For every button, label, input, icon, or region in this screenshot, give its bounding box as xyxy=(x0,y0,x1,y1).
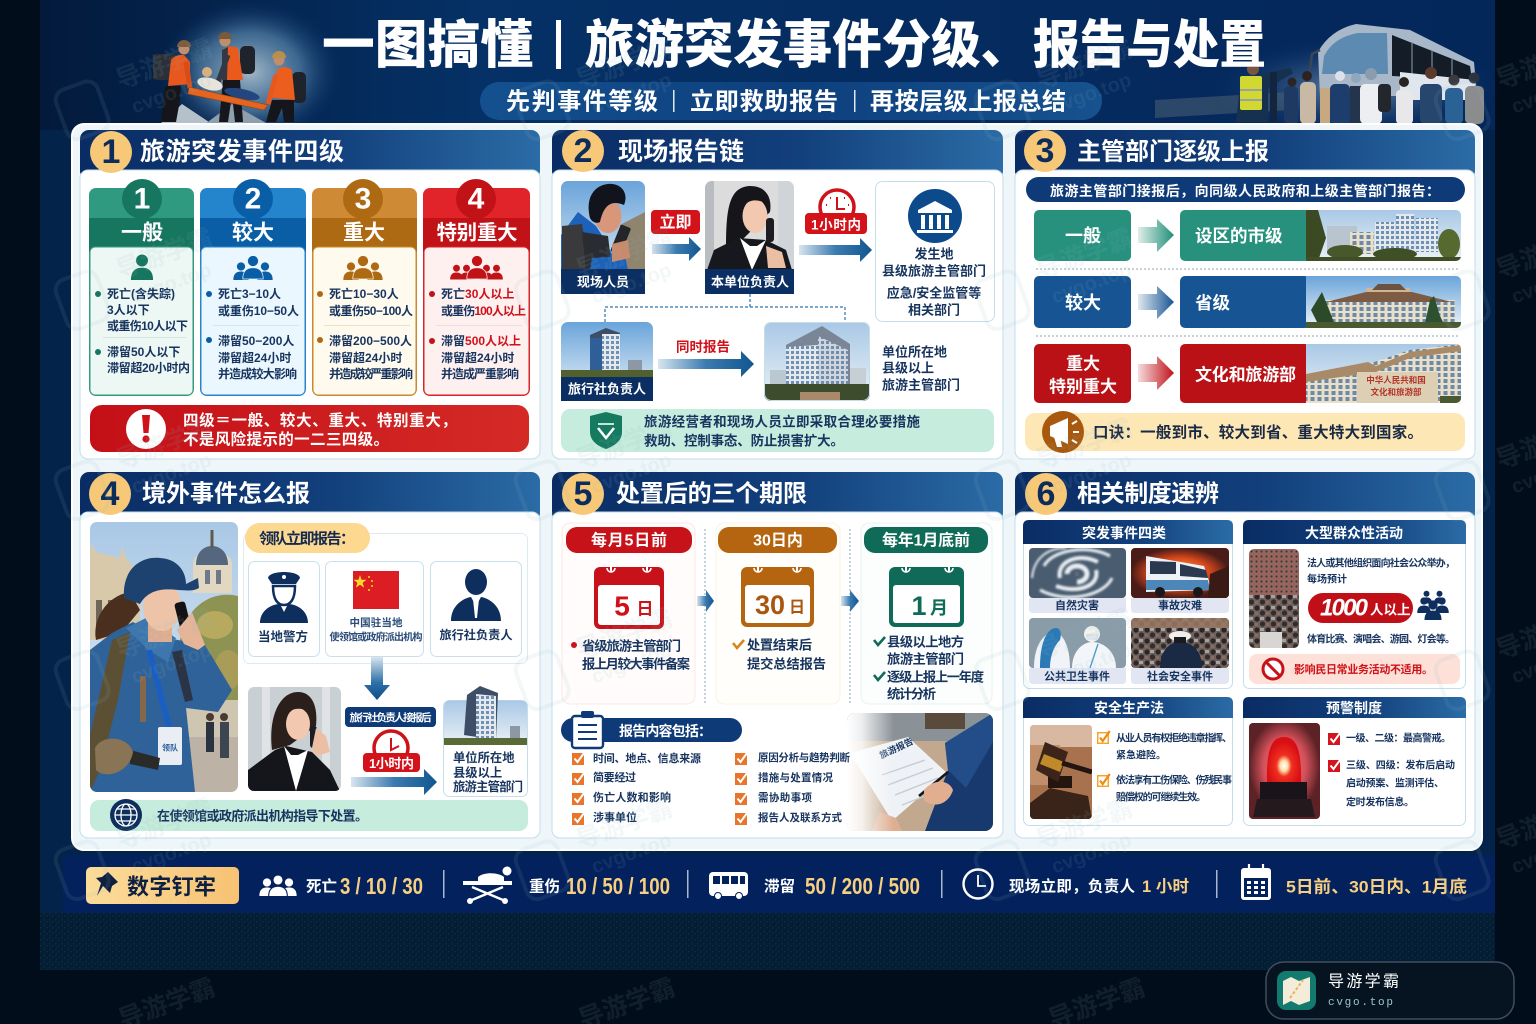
deadline card: within 30 days: 提交总结报告 xyxy=(747,656,826,672)
photo: bus accident: 事故灾难 xyxy=(1158,598,1202,612)
watermarks: cvgo.top xyxy=(129,69,215,118)
watermarks: 导游学霸 xyxy=(113,414,216,475)
row: major to the ministry: 重大 xyxy=(1066,354,1100,374)
panel 3 header: 主管部门逐级上报 xyxy=(1077,138,1269,166)
panel 6 header xyxy=(1015,472,1475,838)
box: department at location: 旅游主管部门 xyxy=(453,779,523,794)
arrow: down xyxy=(364,657,390,700)
subtitle pill xyxy=(480,82,1102,120)
checklist: report contents: 需协助事项 xyxy=(758,791,812,804)
card: embassy or consulate xyxy=(326,562,424,656)
banner: report to government xyxy=(1026,177,1465,202)
arrow: staff to unit head xyxy=(652,237,701,261)
brand badge: 导游学霸 xyxy=(1328,972,1399,990)
sub-card: work safety law: 从业人员有权拒绝违章指挥、 xyxy=(1116,732,1232,744)
level card 2: larger: 并造成较大影响 xyxy=(218,366,297,381)
main title: 报告与处置 xyxy=(1033,17,1266,75)
deadlines: 5日前、30日内、1月底 xyxy=(1286,876,1467,896)
panel 4 header xyxy=(80,472,540,838)
brand badge: cvgo.top xyxy=(1328,997,1393,1009)
panel 4 header: 4 xyxy=(101,475,120,513)
level card 4: especially major: 并造成严重影响 xyxy=(441,366,519,381)
deadline card: before the 5th: 省级旅游主管部门 xyxy=(582,638,681,654)
subtitle pill: 再按层级上报总结 xyxy=(870,88,1066,116)
deadline card: before the 5th: 每月5日前 xyxy=(591,530,667,550)
dotted separators xyxy=(1036,269,1458,336)
photo: public health: 公共卫生事件 xyxy=(1044,669,1110,683)
box: department at location: 单位所在地 xyxy=(453,750,515,765)
sub-card: early warning system: 定时发布信息。 xyxy=(1346,796,1414,808)
badge: clock, within one hour: 1小时内 xyxy=(811,216,861,232)
level card 4: especially major: 或重伤100人以上 xyxy=(441,303,526,318)
text: department at unit location: 旅游主管部门 xyxy=(882,378,960,392)
label: report at the same time: 同时报告 xyxy=(676,338,730,354)
row: larger to provincial level: 较大 xyxy=(1065,292,1101,313)
deadline card: within 30 days xyxy=(716,523,840,704)
main title: 旅游突发事件分级、 xyxy=(585,17,1030,75)
sub-card: work safety law: 依法享有工伤保险、伤残民事 xyxy=(1116,774,1232,786)
deadline card: before end of January: 月 xyxy=(930,598,948,618)
brand badge xyxy=(1266,962,1514,1019)
deadline card: before end of January: 旅游主管部门 xyxy=(887,650,964,666)
level card 4: especially major: 特别重大 xyxy=(436,222,518,244)
photo: typhoon, natural disaster: 自然灾害 xyxy=(1055,598,1099,612)
level card 1: general: 死亡(含失踪) xyxy=(107,286,175,301)
box: county tourism department: 县级旅游主管部门 xyxy=(882,264,986,278)
photo: tour leader on phone xyxy=(90,522,242,792)
main title xyxy=(322,17,1266,75)
sub-card: work safety law xyxy=(1023,697,1233,826)
level card 4: especially major: 4 xyxy=(468,182,485,216)
deaths: 3 / 10 / 30 xyxy=(340,873,423,899)
panel 3 header: 3 xyxy=(1036,132,1054,170)
card: agency head: 旅行社负责人 xyxy=(439,627,513,642)
header illustration: rescue team carrying stretcher xyxy=(153,0,342,144)
sub-card: early warning system: 三级、四级：发布后启动 xyxy=(1346,758,1455,772)
badge: immediately xyxy=(651,210,700,234)
panel 2 header: 2 xyxy=(574,132,592,170)
checklist: report contents: 简要经过 xyxy=(593,770,636,784)
deadline card: within 30 days: 30 xyxy=(755,590,785,620)
warning: not applicable: 影响民日常业务活动不适用。 xyxy=(1294,662,1433,676)
sub-card: work safety law: 紧急避险。 xyxy=(1116,748,1166,762)
photo: social security: 社会安全事件 xyxy=(1147,669,1213,683)
photo: writing the report: 旅游报告 xyxy=(877,735,915,761)
photo: bus accident xyxy=(1131,548,1229,613)
sub-card: large public events xyxy=(1243,520,1466,688)
photo: department building xyxy=(764,322,870,401)
banner: report contents xyxy=(561,711,742,748)
watermarks: cvgo.top xyxy=(129,639,215,688)
sub-card: early warning system xyxy=(1243,697,1466,826)
watermarks: cvgo.top xyxy=(1049,829,1135,878)
level card 3: major: 或重伤50−100人 xyxy=(329,303,413,318)
sub-card: early warning system: 启动预案、监测评估、 xyxy=(1346,776,1444,790)
time limits: 现场立即，负责人 xyxy=(1009,876,1135,896)
row: major to the ministry: 特别重大 xyxy=(1049,378,1117,396)
level card 2: larger: 滞留超24小时 xyxy=(218,350,291,365)
level card 3: major: 滞留200−500人 xyxy=(329,333,412,348)
watermarks: cvgo.top xyxy=(1049,69,1135,118)
level card 2: larger: 死亡3−10人 xyxy=(218,286,281,301)
photo: red beacon xyxy=(1249,723,1320,819)
row: general to city level: 设区的市级 xyxy=(1195,226,1283,246)
warning: not applicable xyxy=(1249,654,1460,684)
row: larger to provincial level xyxy=(1034,276,1461,328)
checklist: report contents: 报告人及联系方式 xyxy=(758,811,842,824)
card: agency head xyxy=(430,562,522,656)
row: major to the ministry xyxy=(1034,344,1461,403)
panel 1 header: 旅游突发事件四级 xyxy=(140,138,344,166)
dotted divider and arrow 1 xyxy=(697,529,714,703)
level card 3: major: 重大 xyxy=(343,222,385,244)
level card 2: larger: 2 xyxy=(245,182,261,216)
photo: tour leader on phone: 领队 xyxy=(162,742,178,752)
badge: 1000 people or more: 1000 xyxy=(1320,594,1369,622)
deadline card: within 30 days: 处置结束后 xyxy=(747,636,812,652)
level card 4: especially major: 滞留500人以上 xyxy=(441,333,521,348)
photo: on-site staff: 现场人员 xyxy=(577,274,629,290)
serious injuries: 重伤 xyxy=(529,878,560,896)
time limits xyxy=(964,870,1190,898)
banner: report contents: 报告内容包括： xyxy=(619,723,712,739)
callout: levels are not risk warnings xyxy=(90,405,529,452)
checklist: report contents: 时间、地点、信息来源 xyxy=(593,751,701,765)
row: major to the ministry: 文化和旅游部 xyxy=(1195,364,1296,384)
box: county tourism department: 相关部门 xyxy=(908,302,960,318)
badge: after the agency head receives the report xyxy=(345,707,436,727)
deadline card: within 30 days: 30日内 xyxy=(753,532,803,550)
watermarks: cvgo.top xyxy=(589,259,675,308)
level card 1: general: 滞留超20小时内 xyxy=(107,360,190,375)
watermarks: 导游学霸 xyxy=(573,34,676,95)
checklist: report contents: 措施与处置情况 xyxy=(758,771,834,784)
main content board xyxy=(72,124,1482,850)
sub-card: four types of emergencies xyxy=(1023,520,1233,688)
watermarks: cvgo.top xyxy=(1049,449,1135,498)
label: leader reports immediately: 领队立即报告： xyxy=(259,530,355,548)
watermarks: cvgo.top xyxy=(129,259,215,308)
deadline card: before the 5th: 报上月较大事件备案 xyxy=(582,656,691,672)
watermarks: 导游学霸 xyxy=(1033,224,1136,285)
watermarks: 导游学霸 xyxy=(573,414,676,475)
panel 3: escalation by department xyxy=(1015,130,1475,459)
mnemonic bar xyxy=(1025,411,1465,453)
arrow: to department xyxy=(351,769,437,795)
tag: memorise the numbers: 数字钉牢 xyxy=(127,874,216,900)
photo: unit head: 本单位负责人 xyxy=(711,274,789,290)
panel 1 header xyxy=(80,130,540,459)
text: department at unit location xyxy=(882,344,960,392)
watermarks: 导游学霸 xyxy=(1033,794,1136,855)
level card 3: major xyxy=(312,179,417,396)
deaths: 死亡 xyxy=(306,878,337,896)
level card 1: general: 3人以下 xyxy=(107,303,150,317)
row: general to city level: 一般 xyxy=(1065,226,1101,246)
callout: levels are not risk warnings: 不是风险提示的一二三四级。 xyxy=(183,430,389,448)
green callout: under embassy guidance: 在使领馆或政府派出机构指导下处置。 xyxy=(157,808,368,824)
deadline card: before end of January: 县级以上地方 xyxy=(887,634,964,650)
panel 2: on-site report chain xyxy=(552,130,1003,459)
serious injuries xyxy=(463,866,670,904)
level card 4: especially major: 死亡30人以上 xyxy=(441,286,514,301)
card: local police xyxy=(248,562,320,656)
level card 2: larger: 较大 xyxy=(232,220,274,244)
level card 4: especially major: 滞留超24小时 xyxy=(441,350,514,365)
card: embassy or consulate: 中国驻当地 xyxy=(350,616,403,629)
level card 3: major: 3 xyxy=(355,182,371,216)
panel 6: related systems xyxy=(1015,472,1475,838)
level card 1: general: 1 xyxy=(134,182,150,216)
arrow: agency head to department xyxy=(658,351,754,377)
sub-card: work safety law: 安全生产法 xyxy=(1094,700,1164,716)
level card 2: larger xyxy=(200,179,306,396)
deadline card: before end of January: 1 xyxy=(911,591,927,621)
panel 5 header: 5 xyxy=(574,475,592,513)
box: county tourism department xyxy=(876,182,994,322)
panel 5 header xyxy=(552,472,1003,838)
deadline card: before end of January: 每年1月底前 xyxy=(882,530,970,550)
level card 4: especially major xyxy=(423,179,530,396)
bottom number summary bar xyxy=(63,855,1495,913)
watermarks: 导游学霸 xyxy=(1033,34,1136,95)
panel 4 header: 境外事件怎么报 xyxy=(142,480,310,508)
watermarks: 导游学霸 xyxy=(573,604,676,665)
photo: gavel xyxy=(1030,725,1092,819)
photo: on-site staff xyxy=(561,181,645,294)
panel 5 header: 处置后的三个期限 xyxy=(616,480,807,508)
sub-card: four types of emergencies: 突发事件四类 xyxy=(1082,525,1166,541)
deadline card: before end of January xyxy=(861,523,992,704)
panel 3 header xyxy=(1015,130,1475,459)
photo: typhoon, natural disaster xyxy=(1029,548,1126,613)
watermarks: 导游学霸 xyxy=(113,604,216,665)
watermarks: cvgo.top xyxy=(589,829,675,878)
badge: clock, within one hour xyxy=(805,190,867,234)
checklist: report contents: 伤亡人数和影响 xyxy=(593,790,671,804)
watermarks: 导游学霸 xyxy=(113,34,216,95)
box: county tourism department: 应急/安全监管等 xyxy=(887,286,981,300)
callout: levels are not risk warnings: 四级＝一般、较大、重大、特别重大， xyxy=(183,410,457,430)
card: embassy or consulate: 使领馆或政府派出机构 xyxy=(330,630,422,644)
green callout: immediate measures: 救助、控制事态、防止损害扩大。 xyxy=(644,432,844,448)
main title: 一图搞懂 xyxy=(322,17,533,75)
badge: immediately: 立即 xyxy=(659,212,692,232)
deaths xyxy=(259,873,423,899)
banner: report to government: 旅游主管部门接报后，向同级人民政府和上级主管部门报告： xyxy=(1050,183,1440,199)
panel 5: three deadlines xyxy=(552,472,1003,838)
panel 6 header: 6 xyxy=(1037,475,1055,513)
row: larger to provincial level: 省级 xyxy=(1195,293,1230,313)
box: department at location xyxy=(444,686,528,796)
deadline card: before end of January: 逐级上报上一年度 xyxy=(887,668,984,684)
header illustration: tour bus and group of tourists xyxy=(1155,24,1500,138)
photo: travel agency head: 旅行社负责人 xyxy=(568,382,646,396)
green callout: immediate measures: 旅游经营者和现场人员立即采取合理必要措施 xyxy=(644,414,920,430)
photo: writing the report xyxy=(847,713,993,831)
checklist: report contents: 原因分析与趋势判断 xyxy=(758,751,850,764)
panel 2 header xyxy=(552,130,1003,459)
watermarks: 导游学霸 xyxy=(1033,604,1136,665)
sub-card: large public events: 体育比赛、演唱会、游园、灯会等。 xyxy=(1307,632,1455,646)
green callout: under embassy guidance xyxy=(90,799,528,831)
arrow: unit head to county department xyxy=(799,238,872,262)
deadline card: before end of January: 统计分析 xyxy=(887,686,936,702)
checklist: report contents xyxy=(572,751,850,825)
icon: group of people xyxy=(1417,591,1449,620)
mnemonic bar: 口诀：一般到市、较大到省、重大特大到国家。 xyxy=(1093,422,1423,442)
stranded: 滞留 xyxy=(764,876,795,896)
green callout: immediate measures xyxy=(561,409,994,452)
box: county tourism department: 发生地 xyxy=(914,246,954,262)
sub-card: early warning system: 一级、二级：最高警戒。 xyxy=(1346,732,1451,744)
badge: clock, within one hour xyxy=(363,731,420,772)
panel 1: four levels xyxy=(80,130,540,459)
watermarks: cvgo.top xyxy=(589,69,675,118)
level card 3: major: 滞留超24小时 xyxy=(329,350,402,365)
level card 1: general xyxy=(89,179,194,396)
box: department at location: 县级以上 xyxy=(453,765,502,780)
row: general to city level xyxy=(1034,210,1461,261)
watermarks: 导游学霸 xyxy=(573,224,676,285)
photo: crowd xyxy=(1249,549,1299,648)
card: local police: 当地警方 xyxy=(258,629,308,644)
watermarks: 导游学霸 xyxy=(573,794,676,855)
sub-card: large public events: 法人或其他组织面向社会公众举办， xyxy=(1307,556,1455,570)
level card 2: larger: 或重伤10−50人 xyxy=(218,303,299,318)
watermarks: 导游学霸 xyxy=(113,794,216,855)
serious injuries: 10 / 50 / 100 xyxy=(566,873,670,899)
label: leader reports immediately xyxy=(244,523,528,664)
level card 1: general: 滞留50人以下 xyxy=(107,344,180,359)
deadline card: before the 5th xyxy=(562,523,695,704)
stranded xyxy=(709,872,920,900)
dotted divider and arrow 2 xyxy=(841,529,859,703)
level card 1: general: 一般 xyxy=(121,222,163,244)
photo: social security xyxy=(1131,618,1229,684)
sub-card: work safety law: 赔偿权的可继续生效。 xyxy=(1116,790,1206,804)
row: major to the ministry: 文化和旅游部 xyxy=(1370,387,1422,397)
badge: 1000 people or more: 人以上 xyxy=(1370,602,1410,618)
dashed connector xyxy=(605,294,845,322)
badge: clock, within one hour: 1小时内 xyxy=(369,756,414,771)
panel 6 header: 相关制度速辨 xyxy=(1077,480,1219,508)
panel 1 header: 1 xyxy=(102,133,120,171)
watermarks: 导游学霸 xyxy=(113,224,216,285)
watermarks: cvgo.top xyxy=(129,829,215,878)
level card 3: major: 并造成较严重影响 xyxy=(329,366,413,381)
text: department at unit location: 县级以上 xyxy=(882,360,934,376)
sub-card: early warning system: 预警制度 xyxy=(1326,700,1382,716)
row: major to the ministry: 中华人民共和国 xyxy=(1366,375,1426,385)
panel 2 header: 现场报告链 xyxy=(618,138,744,166)
checklist: report contents: 涉事单位 xyxy=(593,810,637,824)
photo: travel agency head xyxy=(561,322,653,401)
text: department at unit location: 单位所在地 xyxy=(882,344,947,360)
watermarks: cvgo.top xyxy=(589,639,675,688)
level card 3: major: 死亡10−30人 xyxy=(329,286,399,301)
badge: 1000 people or more xyxy=(1308,593,1413,623)
stranded: 50 / 200 / 500 xyxy=(805,873,920,899)
watermarks: cvgo.top xyxy=(589,449,675,498)
photo: public health xyxy=(1029,618,1126,684)
photo: unit head xyxy=(705,181,794,294)
watermarks: cvgo.top xyxy=(1049,259,1135,308)
deadlines xyxy=(1241,864,1467,900)
subtitle pill: 先判事件等级 xyxy=(506,88,658,116)
deadline card: before the 5th: 日 xyxy=(636,600,654,618)
level card 2: larger: 滞留50−200人 xyxy=(218,333,294,348)
watermarks: 导游学霸 xyxy=(1033,414,1136,475)
sub-card: large public events: 每场预计 xyxy=(1307,572,1347,586)
level card 1: general: 或重伤10人以下 xyxy=(107,318,188,333)
panel 4: overseas reporting xyxy=(80,472,540,838)
deadline card: within 30 days: 日 xyxy=(789,600,805,616)
badge: after the agency head receives the report: 旅行社负责人接报后 xyxy=(350,711,432,724)
sub-card: large public events: 大型群众性活动 xyxy=(1305,525,1403,541)
time limits: 1 小时 xyxy=(1142,877,1190,896)
tag: memorise the numbers xyxy=(86,867,239,904)
photo: agency head on phone xyxy=(248,687,341,791)
watermarks: cvgo.top xyxy=(129,449,215,498)
watermarks: cvgo.top xyxy=(1049,639,1135,688)
deadline card: before the 5th: 5 xyxy=(614,590,630,622)
subtitle pill: 立即救助报告 xyxy=(690,88,838,116)
